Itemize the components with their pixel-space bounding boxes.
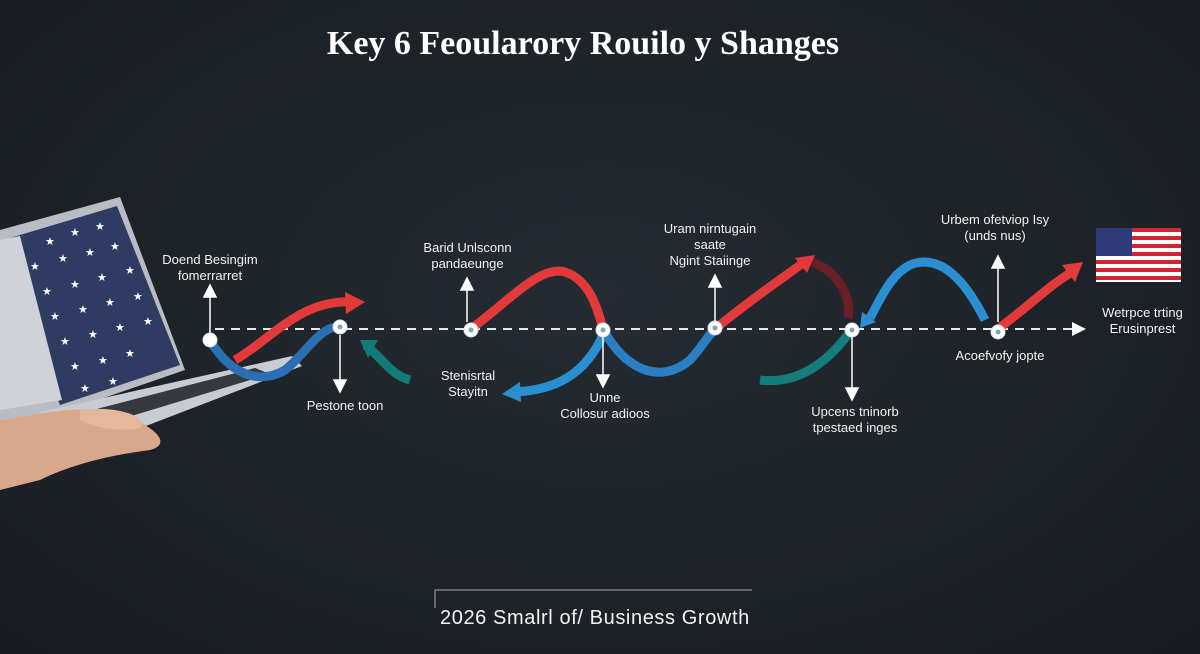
bottom divider [435,590,752,608]
laptop with hand: ★ [95,221,105,233]
label: Barid Unlsconn: Barid Unlsconn [423,240,512,255]
laptop with hand: ★ [80,383,90,395]
laptop with hand: ★ [133,291,143,303]
laptop with hand: ★ [58,253,68,265]
label: Wetrpce trting: Wetrpce trting [1102,305,1183,320]
label: Urbem ofetviop: (unds nus) [964,228,1026,243]
laptop with hand: ★ [115,322,125,334]
laptop with hand: ★ [50,311,60,323]
label: Uram nirntugain [664,221,756,268]
label: Doend Besingim: Doend Besingim [162,252,258,267]
laptop with hand: ★ [110,241,120,253]
laptop with hand: ★ [70,361,80,373]
laptop with hand: ★ [105,297,115,309]
label: Stenisrtal Stayitn: Stenisrtal [441,368,495,383]
wave curves [210,262,1072,392]
label: Uram nirntugain: Uram nirntugain [664,221,756,236]
label: Urbem ofetviop [941,212,1050,243]
label: Unne Collosur adioos [560,390,650,421]
label: Uram nirntugain: Ngint Staiinge [670,253,750,268]
laptop with hand: ★ [98,355,108,367]
nodes [203,320,1005,347]
laptop with hand: ★ [78,304,88,316]
label: Stenisrtal Stayitn [441,368,495,399]
label: Acoefvofy jopte: Acoefvofy jopte [956,348,1044,363]
title: Key 6 Feoularory Rouilo y Shanges [327,25,839,62]
label: Doend Besingim [162,252,258,283]
laptop with hand: ★ [45,236,55,248]
laptop with hand: ★ [125,348,135,360]
label: Doend Besingim: fomerrarret [178,268,242,283]
dashed timeline [215,328,1075,330]
laptop with hand: ★ [125,265,135,277]
laptop with hand: ★ [42,286,52,298]
label: Upcens tninorb [811,404,899,435]
label: Barid Unlsconn: pandaeunge [431,256,504,271]
label: Upcens tninorb: Upcens tninorb [811,404,899,419]
label: Wetrpce trting [1102,305,1183,336]
label: Wetrpce trting: Erusinprest [1110,321,1175,336]
laptop with hand: ★ [85,247,95,259]
laptop with hand: ★ [60,336,70,348]
laptop with hand: ★ [70,279,80,291]
label: Barid Unlsconn [423,240,512,271]
footer subtitle: 2026 Smalrl of/ Business Growth [440,607,750,629]
laptop with hand: ★ [97,272,107,284]
laptop with hand: ★ [88,329,98,341]
label: Unne Collosur adioos: Unne [589,390,621,405]
label: Unne Collosur adioos: Collosur adioos [560,406,650,421]
laptop with hand: ★ [30,261,40,273]
laptop with hand: ★ [70,227,80,239]
label: Stenisrtal Stayitn: Stayitn [448,384,488,399]
laptop with hand [0,197,302,490]
label: Pestone toon: Pestone toon [307,398,383,413]
label: Uram nirntugain: saate [694,237,726,252]
label: Upcens tninorb: tpestaed inges [813,420,897,435]
US flag [1096,228,1181,282]
laptop with hand: ★ [143,316,153,328]
vertical pointer arrows [204,256,1004,400]
laptop with hand: ★ [108,376,118,388]
arrowheads [345,255,1083,402]
label: Urbem ofetviop: Urbem ofetviop Isy [941,212,1049,227]
